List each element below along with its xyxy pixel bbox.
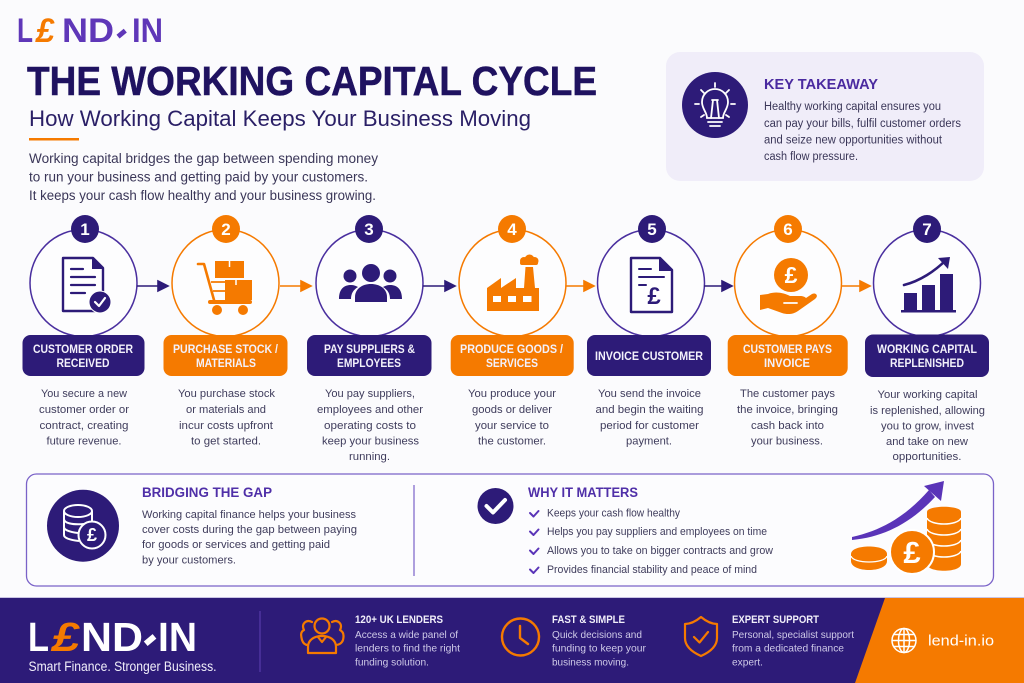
footer logo: £ [50,614,80,660]
step 1: customer order received [22,215,144,448]
fast and simple text [552,614,647,668]
logo: top: L [17,12,33,50]
step 6: customer pays invoice: 6 [783,220,793,239]
step 2: purchase stock: 2 [221,220,231,239]
intro text: to run your business and getting paid by your customers. [29,170,368,184]
website address: lend-in.io [928,632,994,650]
icon: hand with coin [760,258,817,314]
arrow: 1 to 2 [137,281,168,291]
icon: people [339,264,402,302]
intro text: Working capital bridges the gap between spending money [29,151,378,166]
step 7: working capital replenished: REPLENISHED [890,358,964,370]
step 7: working capital replenished [865,215,989,463]
step 3: pay suppliers and employees: operating costs to [324,420,416,432]
icon: hand with coin: £ [785,262,798,288]
step 6: customer pays invoice [728,215,848,448]
fast and simple text: business moving. [552,658,629,668]
fast and simple text: FAST & SIMPLE [552,614,625,626]
bridging the gap text: for goods or services and getting paid [142,539,330,551]
panel: bridging the gap and why it matters [26,474,994,586]
step 4: produce goods: You produce your [468,388,556,400]
icon: coins and growth arrow: £ [903,535,921,570]
logo: top: £ [35,12,55,50]
bridging the gap text: cover costs during the gap between paying [142,524,357,536]
arrow: 5 to 6 [704,281,732,291]
logo: top: - [104,14,137,50]
expert support text: expert. [732,658,763,668]
icon: globe [892,628,916,652]
checklist: Allows you to take on bigger contracts and grow [547,545,774,557]
key takeaway text: Healthy working capital ensures you [764,101,941,113]
step 1: customer order received: You secure a new [41,388,128,400]
logo: top: ND [62,12,114,50]
step 4: produce goods: your service to [475,420,549,432]
step 3: pay suppliers and employees: employees and other [317,404,423,416]
step 5: invoice customer: payment. [626,436,672,448]
step 5: invoice customer [587,215,711,448]
lenders text: funding solution. [355,658,429,668]
step 1: customer order received: customer order or [39,404,129,416]
step 6: customer pays invoice: the invoice, bringing [737,404,838,416]
icon: coin stack database [47,490,119,562]
heading: why it matters: WHY IT MATTERS [528,485,638,500]
step 4: produce goods: the customer. [478,436,546,448]
fast and simple text: Quick decisions and [552,630,642,641]
step 7: working capital replenished: Your working capital [878,389,978,401]
step 5: invoice customer: 5 [647,220,657,239]
website panel [855,598,1024,683]
step 7: working capital replenished: 7 [922,220,932,239]
checklist: Helps you pay suppliers and employees on time [547,526,767,538]
step 1: customer order received: future revenue. [46,436,122,448]
expert support text: from a dedicated finance [732,644,844,654]
arrow: 6 to 7 [842,281,870,291]
key takeaway text: cash flow pressure. [764,151,858,163]
step 7: working capital replenished: is replenished, allowing [870,405,985,417]
step 2: purchase stock: to get started. [191,436,261,448]
icon: coin stack database: £ [87,525,97,545]
heading: key takeaway: KEY TAKEAWAY [764,76,878,93]
expert support text: Personal, specialist support [732,630,854,641]
step 1: customer order received: 1 [80,220,90,239]
step 3: pay suppliers and employees: EMPLOYEES [337,358,401,370]
title: THE WORKING CAPITAL CYCLE [27,58,597,104]
icon: check badge [478,488,514,524]
footer logo: - [127,615,168,660]
tagline: Smart Finance. Stronger Business. [28,659,216,674]
icon: shopping cart [198,261,252,315]
checklist: Provides financial stability and peace of mind [547,564,757,576]
accent line [29,138,79,140]
arrow: 4 to 5 [566,281,594,291]
bridging the gap text: by your customers. [142,554,236,566]
step 2: purchase stock: You purchase stock [178,388,275,400]
step 7: working capital replenished: you to grow, invest [881,420,975,432]
step 2: purchase stock: or materials and [186,404,266,416]
step 6: customer pays invoice: The customer pays [740,388,835,400]
key takeaway text: can pay your bills, fulfil customer orders [764,118,961,130]
step 1: customer order received: CUSTOMER ORDER [33,344,134,356]
step 3: pay suppliers and employees: keep your business [322,436,419,448]
icon: invoice: £ [647,283,661,310]
icon: shield [685,617,717,656]
step 6: customer pays invoice: your business. [751,436,823,448]
icon: factory [487,254,539,311]
heading: bridging the gap: BRIDGING THE GAP [142,485,272,500]
step 4: produce goods [451,215,574,448]
step 5: invoice customer: period for customer [600,420,699,432]
icon: lightbulb [682,72,748,138]
step 5: invoice customer: INVOICE CUSTOMER [595,351,704,363]
step 6: customer pays invoice: CUSTOMER PAYS [743,344,832,356]
icon: order document [63,258,111,313]
step 4: produce goods: goods or deliver [472,404,552,416]
key takeaway text: and seize new opportunities without [764,134,943,146]
step 3: pay suppliers and employees: You pay suppliers, [325,388,415,400]
step 4: produce goods: PRODUCE GOODS / [460,344,564,356]
logo: top [17,12,163,50]
logo: top: IN [132,12,163,50]
footer logo: ND [81,614,143,660]
intro text [29,151,378,203]
step 6: customer pays invoice: cash back into [751,420,824,432]
lenders text: 120+ UK LENDERS [355,614,443,626]
step 2: purchase stock: MATERIALS [196,358,256,370]
icon: clock [502,618,539,656]
icon: rising bar chart [901,257,956,312]
icon: coins and growth arrow [851,481,961,574]
step 5: invoice customer: You send the invoice [598,388,701,400]
step 7: working capital replenished: WORKING CAPITAL [877,344,977,356]
expert support text: EXPERT SUPPORT [732,614,819,626]
icon: invoice [631,258,672,312]
fast and simple text: funding to keep your [552,644,647,654]
bridging the gap text: Working capital finance helps your business [142,509,356,521]
step 3: pay suppliers and employees: running. [349,451,390,463]
footer band [0,597,1024,683]
lenders text [355,614,460,668]
subtitle: How Working Capital Keeps Your Business Moving [29,106,531,131]
footer logo: L [28,614,49,660]
step 6: customer pays invoice: INVOICE [764,358,810,370]
arrow: 2 to 3 [280,281,311,291]
footer logo: IN [158,614,197,660]
bridging the gap text [142,509,357,566]
lenders text: Access a wide panel of [355,630,458,641]
step 1: customer order received: contract, creating [40,420,128,432]
arrow: 3 to 4 [423,281,455,291]
icon: lenders people [301,618,344,653]
step 7: working capital replenished: and take on new [886,436,969,448]
checklist: Keeps your cash flow healthy [547,508,680,520]
footer logo [28,614,197,660]
lenders text: lenders to find the right [355,644,460,654]
checklist [530,508,774,576]
key takeaway text [764,101,961,163]
step 3: pay suppliers and employees: 3 [364,220,374,239]
step 3: pay suppliers and employees: PAY SUPPLIERS & [324,344,415,356]
step 5: invoice customer: and begin the waiting [596,404,704,416]
step 4: produce goods: 4 [507,220,517,239]
intro text: It keeps your cash flow healthy and your business growing. [29,188,376,203]
step 2: purchase stock: incur costs upfront [179,420,274,432]
step 4: produce goods: SERVICES [486,358,538,370]
expert support text [732,614,854,668]
step 2: purchase stock: PURCHASE STOCK / [173,344,279,356]
step 2: purchase stock [164,215,288,448]
panel: key takeaway [666,52,984,181]
step 1: customer order received: RECEIVED [56,358,110,370]
step 7: working capital replenished: opportunities. [892,451,962,463]
step 3: pay suppliers and employees [307,215,432,463]
